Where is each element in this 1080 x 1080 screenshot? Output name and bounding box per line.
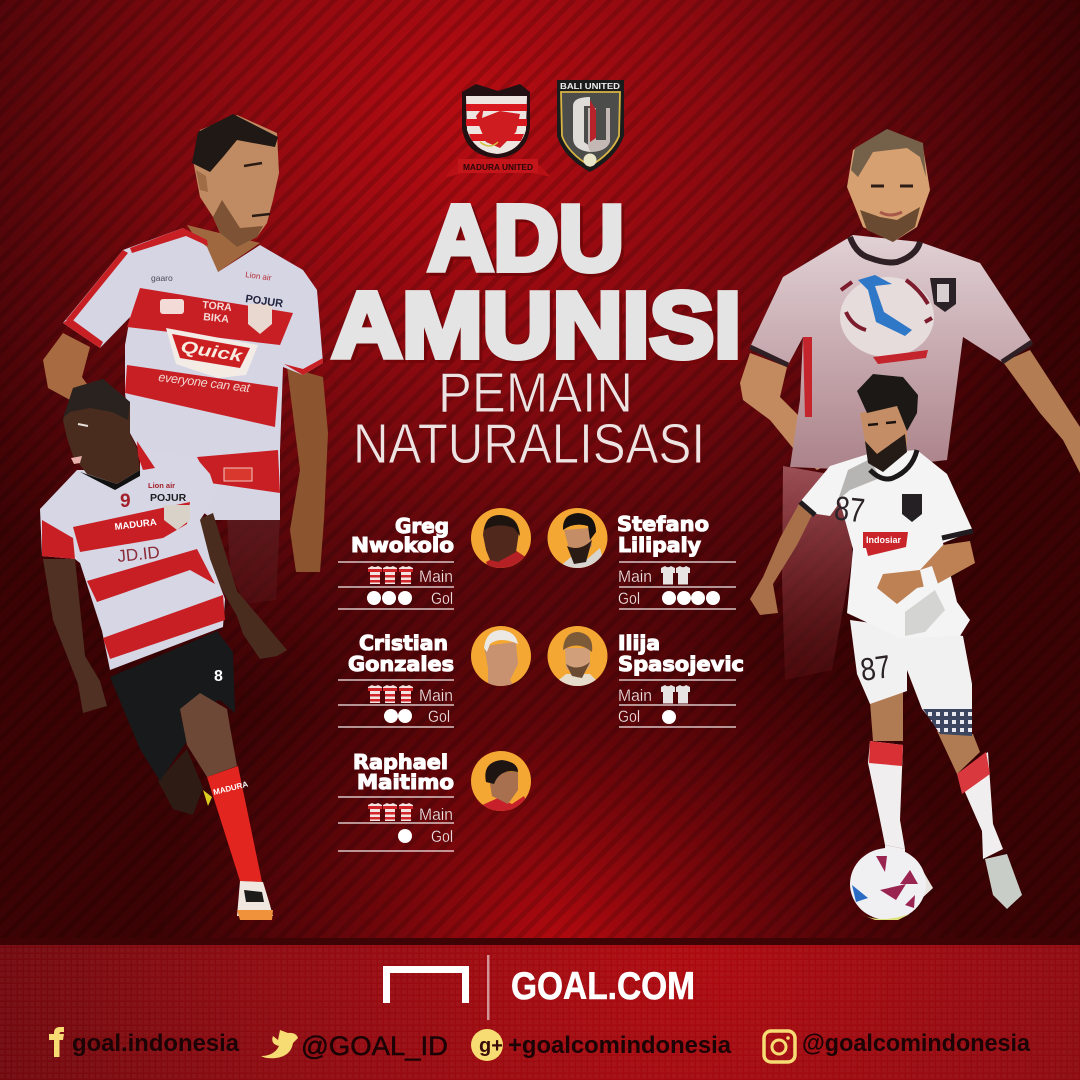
logo: Bali United	[557, 80, 624, 172]
player: Raphael Maitimo, back left	[43, 114, 328, 604]
player: Greg Nwokolo, front left: POJUR	[150, 492, 187, 504]
card: Stefano Lilipaly: Stefano	[617, 512, 709, 536]
card: Ilija Spasojevic: Ilija	[618, 631, 660, 655]
card: Stefano Lilipaly: Lilipaly	[618, 533, 701, 557]
card: Greg Nwokolo: Nwokolo	[351, 533, 454, 557]
logo: Madura United: MADURA UNITED	[463, 162, 533, 172]
card: Cristian Gonzales: Cristian	[359, 631, 448, 655]
footer band	[0, 945, 1080, 1080]
player: Ilija Spasojevic, back right	[740, 129, 1080, 680]
player: Raphael Maitimo, back left: Quick	[179, 337, 246, 366]
card: Stefano Lilipaly: Main	[618, 567, 652, 586]
player: Raphael Maitimo, back left: gaaro	[151, 273, 173, 283]
player: Greg Nwokolo, front left: MADURA	[114, 517, 157, 533]
player: Stefano Lilipaly, front right: Indosiar	[866, 535, 902, 545]
player: Greg Nwokolo, front left: 9	[120, 491, 131, 512]
card: Ilija Spasojevic: Main	[618, 686, 652, 705]
player: Raphael Maitimo, back left: BIKA	[203, 311, 230, 326]
icon: football	[850, 845, 933, 920]
card: Ilija Spasojevic: Spasojevic	[618, 652, 744, 676]
card: Greg Nwokolo	[338, 508, 531, 609]
player: Greg Nwokolo, front left: Lion air	[148, 481, 175, 490]
player: Greg Nwokolo, front left	[40, 379, 287, 920]
player: Raphael Maitimo, back left: CHICKEN	[190, 361, 236, 379]
title: ADU AMUNISI	[332, 186, 744, 380]
card: Greg Nwokolo: Gol	[431, 589, 453, 608]
subtitle: PEMAIN NATURALISASI: NATURALISASI	[353, 412, 705, 476]
card: Cristian Gonzales: Main	[419, 686, 453, 705]
social: Google Plus: +goalcomindonesia	[508, 1032, 732, 1059]
player: Raphael Maitimo, back left: TORA	[202, 299, 233, 314]
card: Ilija Spasojevic	[548, 626, 744, 727]
player: Stefano Lilipaly, front right: 87	[858, 648, 893, 688]
player: Greg Nwokolo, front left: MADURA	[212, 780, 249, 797]
card: Greg Nwokolo: Greg	[395, 514, 449, 538]
card: Raphael Maitimo: Main	[419, 805, 453, 824]
social: Twitter: @GOAL_ID	[301, 1031, 448, 1061]
player: Raphael Maitimo, back left: everyone can eat	[158, 370, 251, 395]
logo: Goal.com	[383, 955, 695, 1020]
card: Ilija Spasojevic: Gol	[618, 707, 640, 726]
logo: Madura United	[444, 84, 551, 178]
card: Cristian Gonzales	[338, 626, 531, 727]
social: Google Plus: g+	[479, 1035, 503, 1057]
social: Facebook: goal.indonesia	[72, 1030, 240, 1057]
subtitle: PEMAIN NATURALISASI: PEMAIN	[438, 361, 633, 425]
player: Stefano Lilipaly, front right	[750, 374, 1022, 920]
player: Raphael Maitimo, back left: POJUR	[245, 293, 284, 310]
player: Greg Nwokolo, front left: 8	[214, 668, 223, 685]
card: Raphael Maitimo	[338, 750, 531, 851]
logo: Goal.com: GOAL.COM	[511, 965, 695, 1008]
card: Stefano Lilipaly: Gol	[618, 589, 640, 608]
card: Cristian Gonzales: Gol	[428, 707, 450, 726]
icon: ball on jersey	[840, 275, 934, 364]
player: Stefano Lilipaly, front right: 87	[833, 490, 866, 530]
card: Raphael Maitimo: Maitimo	[357, 770, 454, 794]
title: ADU AMUNISI: AMUNISI	[335, 276, 744, 380]
card: Greg Nwokolo: Main	[419, 567, 453, 586]
title: ADU AMUNISI: ADU	[431, 189, 627, 293]
card: Raphael Maitimo: Raphael	[353, 750, 448, 774]
card: Stefano Lilipaly	[548, 508, 736, 609]
card: Raphael Maitimo: Gol	[431, 827, 453, 846]
card: Cristian Gonzales: Gonzales	[348, 652, 454, 676]
title: ADU AMUNISI: ADU	[428, 186, 624, 290]
title: ADU AMUNISI: AMUNISI	[332, 273, 741, 377]
player: Raphael Maitimo, back left: Lion air	[245, 270, 272, 283]
logo: Bali United: BALI UNITED	[560, 81, 620, 91]
player: Greg Nwokolo, front left: JD.ID	[116, 543, 161, 566]
subtitle: PEMAIN NATURALISASI	[353, 361, 705, 476]
social: Instagram: @goalcomindonesia	[802, 1030, 1031, 1057]
